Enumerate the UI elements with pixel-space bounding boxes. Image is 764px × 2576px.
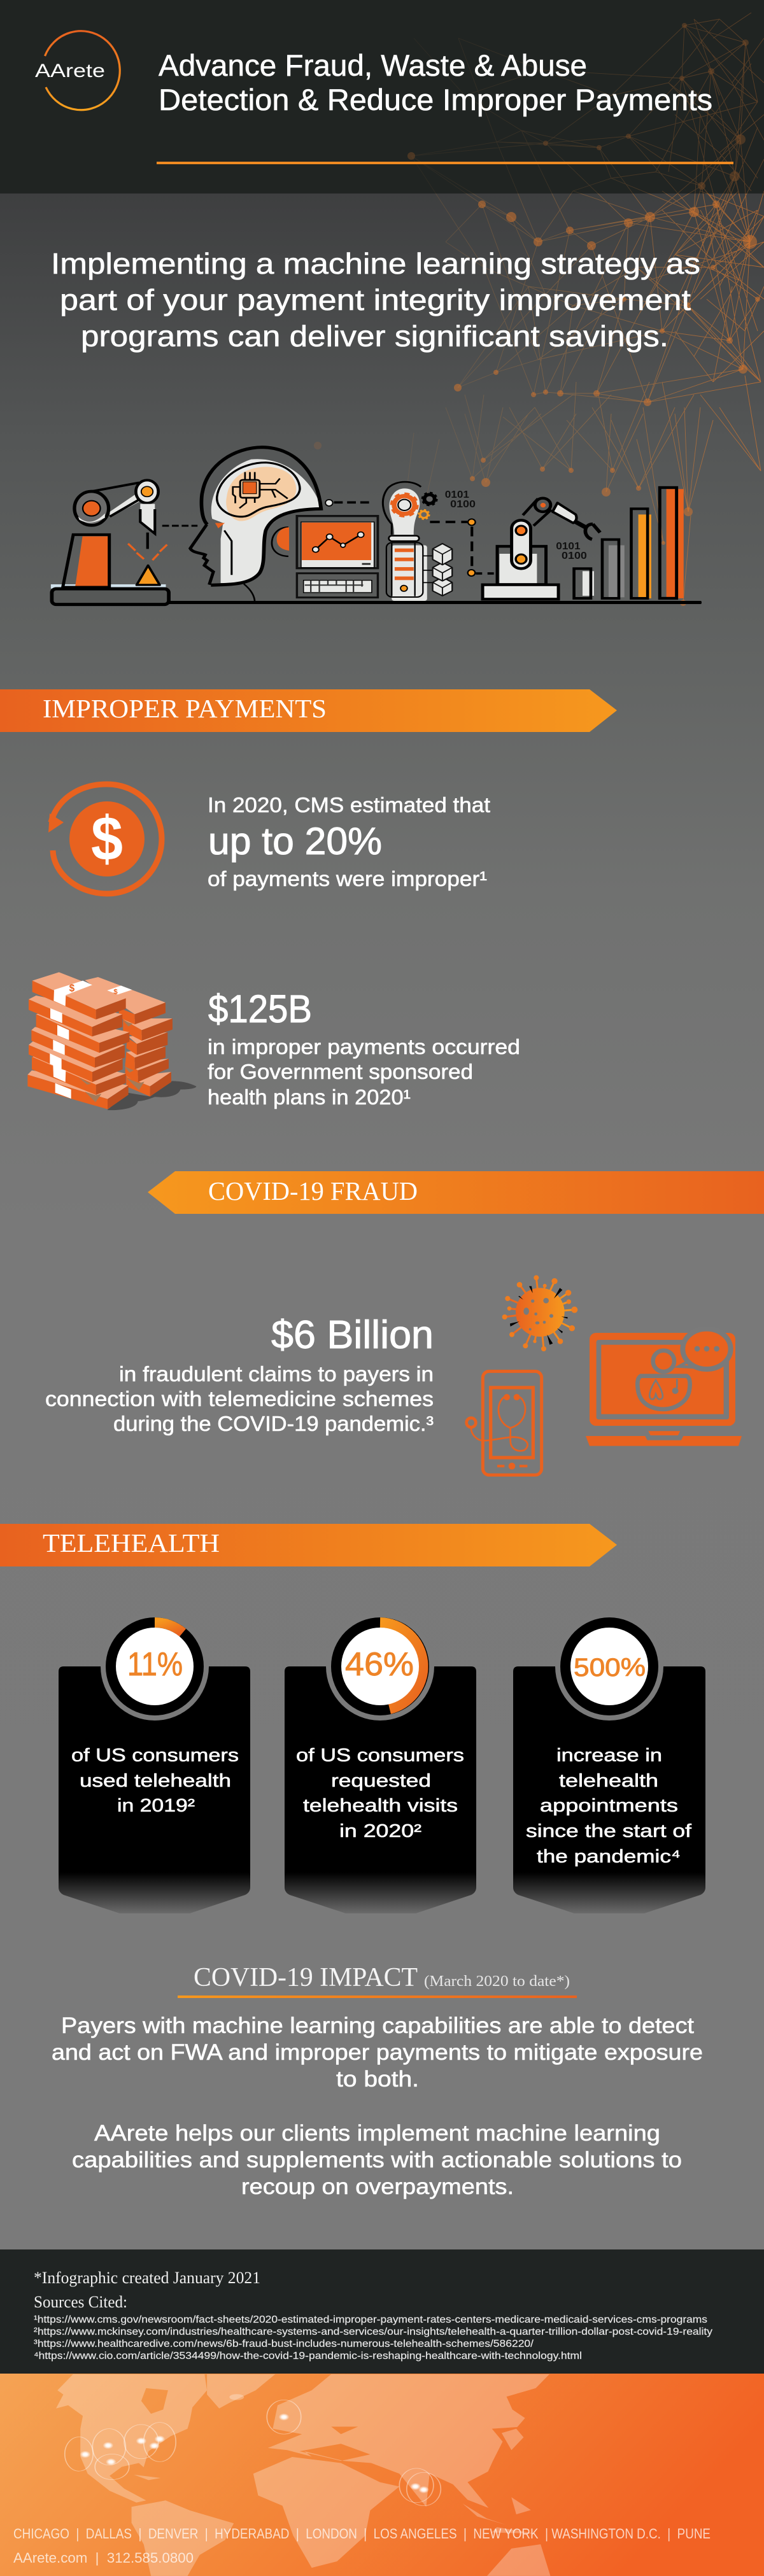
card: 500 percent: 500% [574,1654,646,1682]
intro statement: part of your payment integrity improvement [60,283,691,316]
stat: 125B: $125B [208,987,312,1031]
heading: covid-19 impact: (March 2020 to date*) [424,1973,570,1990]
card: 11 percent: in 2019² [117,1796,195,1816]
card: 11 percent: used telehealth [80,1771,231,1791]
title: Detection & Reduce Improper Payments [159,83,712,116]
panel: sources: ¹https://www.cms.gov/newsroom/fact-sheets/2020-estimated-improper-payment-rates-centers-medicare-medicaid-services-cms-programs [34,2314,707,2325]
text: impact paragraphs [52,2013,703,2199]
card: 11 percent: of US consumers [71,1745,239,1766]
bar chart [574,488,684,598]
back stack: $ [113,989,118,996]
binary labels: 0101 [445,488,469,500]
intro statement [51,247,700,353]
text: impact paragraphs: and act on FWA and improper payments to mitigate exposure [52,2040,703,2065]
intro statement: Implementing a machine learning strategy as [51,247,700,280]
stat: up to 20 percent: up to 20% [208,820,382,862]
text: impact paragraphs: AArete helps our clients implement machine learning [94,2121,660,2146]
icon: virus [502,1275,577,1351]
icon: circular dollar: $ [91,803,123,873]
stat: 6 billion: $6 Billion [271,1313,434,1357]
banner: improper payments: IMPROPER PAYMENTS [43,694,327,723]
binary labels: 0100 [450,498,476,510]
banner: telehealth [0,1524,617,1566]
card: 46 percent [285,1612,476,1913]
panel: sources: ²https://www.mckinsey.com/industries/healthcare-systems-and-services/our-insights/telehealth-a-quarter-trillion-dollar-post-covid-19-reality [34,2326,712,2337]
logo: AArete [35,60,105,81]
front stack: $ [69,983,75,994]
title [159,48,712,116]
ground line [162,601,702,604]
header shade over network [0,0,764,194]
card: 46 percent: telehealth visits [303,1796,458,1816]
stack shadow [107,1081,196,1110]
text: impact paragraphs: capabilities and supplements with actionable solutions to [72,2148,682,2172]
binary labels [445,488,587,561]
heading: covid-19 impact: COVID-19 IMPACT [194,1963,418,1992]
illustration: machine learning factory [51,447,702,605]
panel: sources: ³https://www.healthcaredive.com/news/6b-fraud-bust-includes-numerous-telehealth-schemes/586220/ [34,2339,534,2349]
panel: sources [0,2249,764,2374]
card: 46 percent: 46% [345,1646,414,1683]
panel: orange footer [0,2374,764,2576]
intro statement: programs can deliver significant savings. [81,320,668,353]
card: 46 percent: requested [331,1771,431,1791]
text: impact paragraphs: Payers with machine learning capabilities are able to detect [61,2013,694,2038]
icon: gear bulb and server [383,482,452,601]
card: 46 percent: in 2020² [339,1821,421,1841]
icon: robotic arm [483,498,600,599]
stat: up to 20 percent [208,793,490,890]
stat: 6 billion: during the COVID-19 pandemic.³ [113,1412,434,1435]
stat: 125B: health plans in 2020¹ [208,1085,411,1109]
icon: circular dollar [48,784,162,894]
title: Advance Fraud, Waste & Abuse [159,48,587,82]
banner: covid-19 fraud: COVID-19 FRAUD [208,1176,418,1206]
banner: covid-19 fraud [148,1171,764,1214]
card: 500 percent: increase in [556,1745,662,1766]
icon: smartphone with stethoscope [467,1371,542,1475]
card: 500 percent: since the start of [526,1821,692,1841]
stat: 125B [208,987,520,1109]
text: impact paragraphs: recoup on overpayments. [241,2174,514,2199]
card: 500 percent [513,1612,705,1913]
card: 11 percent [59,1612,250,1913]
icon: computer with line chart [297,516,378,598]
stat: 6 billion: connection with telemedicine schemes [45,1387,434,1411]
text: impact paragraphs: to both. [336,2067,419,2092]
card: 46 percent: of US consumers [296,1745,464,1766]
card: 500 percent: appointments [540,1796,678,1816]
icon: robot arm with conveyor [51,480,197,605]
stat: 125B: in improper payments occurred [208,1035,520,1059]
binary labels: 0101 [556,540,581,552]
city location markers [65,2400,441,2506]
world map [56,2374,550,2576]
front stack [27,972,145,1109]
dashed connectors [430,519,497,576]
header band [0,0,764,194]
back stack [85,977,173,1097]
binary labels: 0100 [562,549,587,561]
card: 500 percent: the pandemic⁴ [537,1847,681,1867]
panel: sources: *Infographic created January 2021 [34,2269,260,2287]
stat: up to 20 percent: In 2020, CMS estimated that [208,793,490,817]
panel: sources: ⁴https://www.cio.com/article/3534499/how-the-covid-19-pandemic-is-reshaping-healthcare-with-technology.html [34,2351,582,2361]
logo [35,31,120,110]
heading: covid-19 impact [178,1963,577,1998]
icon: laptop telehealth [586,1329,742,1446]
icon: stacks of money [27,972,196,1110]
panel: sources: Sources Cited: [34,2293,127,2311]
network decoration [314,13,764,606]
banner: telehealth: TELEHEALTH [43,1528,220,1558]
stat: 6 billion: in fraudulent claims to payers in [119,1362,434,1386]
banner: improper payments [0,689,617,732]
stat: up to 20 percent: of payments were improper¹ [208,867,487,890]
icon: AI head with chip brain [190,447,372,603]
header rule [157,162,733,164]
card: 500 percent: telehealth [559,1771,658,1791]
contact details: AArete.com | 312.585.0800 [13,2550,194,2566]
card: 11 percent: 11% [127,1646,183,1683]
stat: 125B: for Government sponsored [208,1060,473,1083]
stat: 6 billion [45,1313,434,1435]
